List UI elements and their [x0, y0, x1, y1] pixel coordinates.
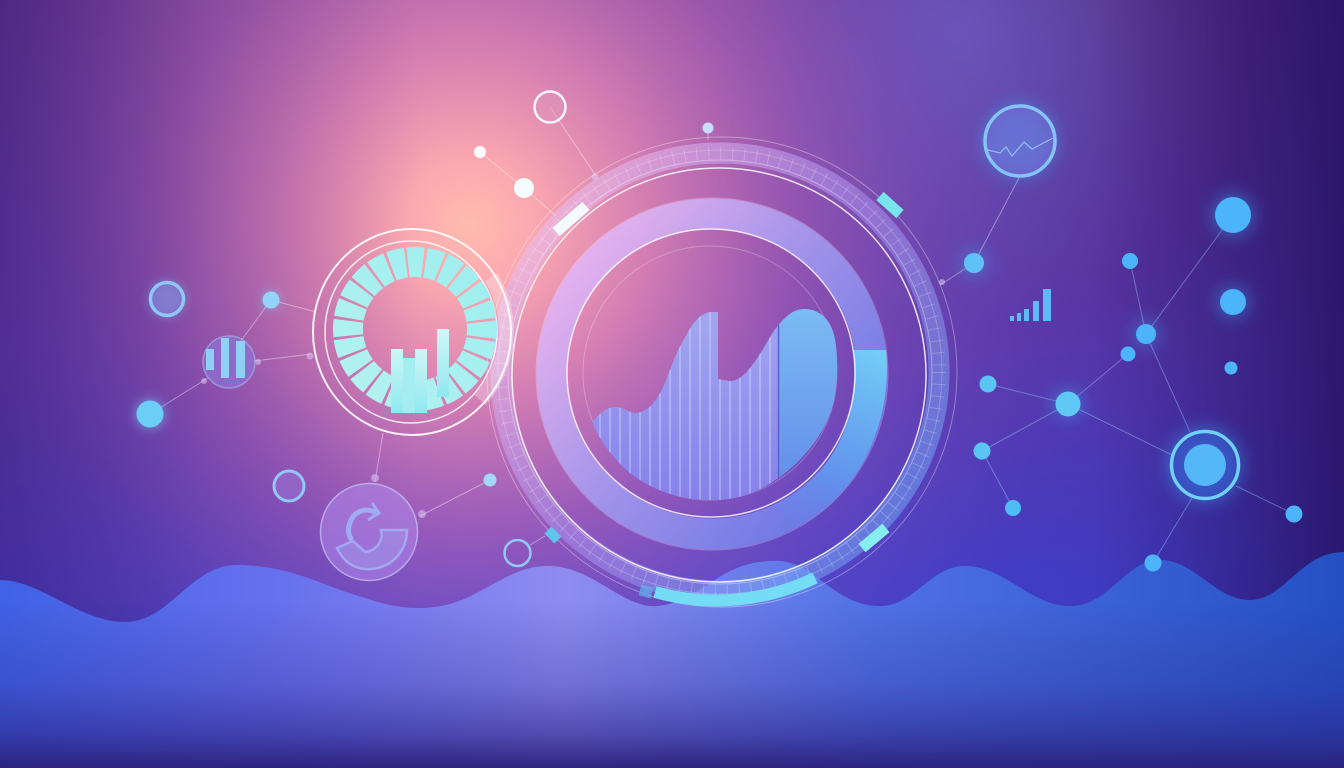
gauge outer hairline ring	[487, 137, 957, 607]
small gauge glass overlay arc	[480, 277, 506, 400]
top ring node	[534, 92, 566, 122]
connector joint dots	[201, 174, 945, 518]
connector lines	[150, 107, 1294, 563]
top small dot	[474, 146, 486, 158]
icon: line chart circle	[985, 106, 1055, 176]
icon: circular arrows	[320, 484, 418, 580]
area chart	[590, 305, 841, 505]
small gauge bar chart	[391, 329, 449, 413]
gauge tick band	[498, 150, 942, 594]
left large dot node	[136, 400, 164, 428]
top dot	[514, 178, 534, 198]
lower left ring node	[274, 471, 304, 501]
gauge cyan ring segment	[775, 350, 887, 530]
glow: left nodes	[134, 281, 281, 430]
small gauge with bars	[313, 229, 511, 435]
icon: mini bars	[1010, 289, 1051, 321]
gauge wide ring	[552, 214, 872, 534]
left ring node	[150, 282, 184, 316]
lower ring node	[504, 540, 530, 566]
ring highlight edges	[536, 198, 888, 550]
icon: bars in circle	[203, 336, 255, 388]
small gauge rings	[313, 229, 511, 435]
bottom wave band	[0, 552, 1344, 768]
small gauge segments	[341, 255, 489, 403]
node	[964, 253, 984, 273]
gauge accent segments	[548, 196, 900, 600]
main circular gauge	[487, 137, 957, 607]
right network nodes	[974, 197, 1302, 572]
target node	[1172, 432, 1238, 498]
glow: right nodes	[962, 105, 1253, 501]
top center dot	[702, 122, 714, 134]
gauge white ring	[512, 168, 926, 582]
left dot node	[262, 292, 280, 308]
small dot node	[484, 474, 496, 486]
